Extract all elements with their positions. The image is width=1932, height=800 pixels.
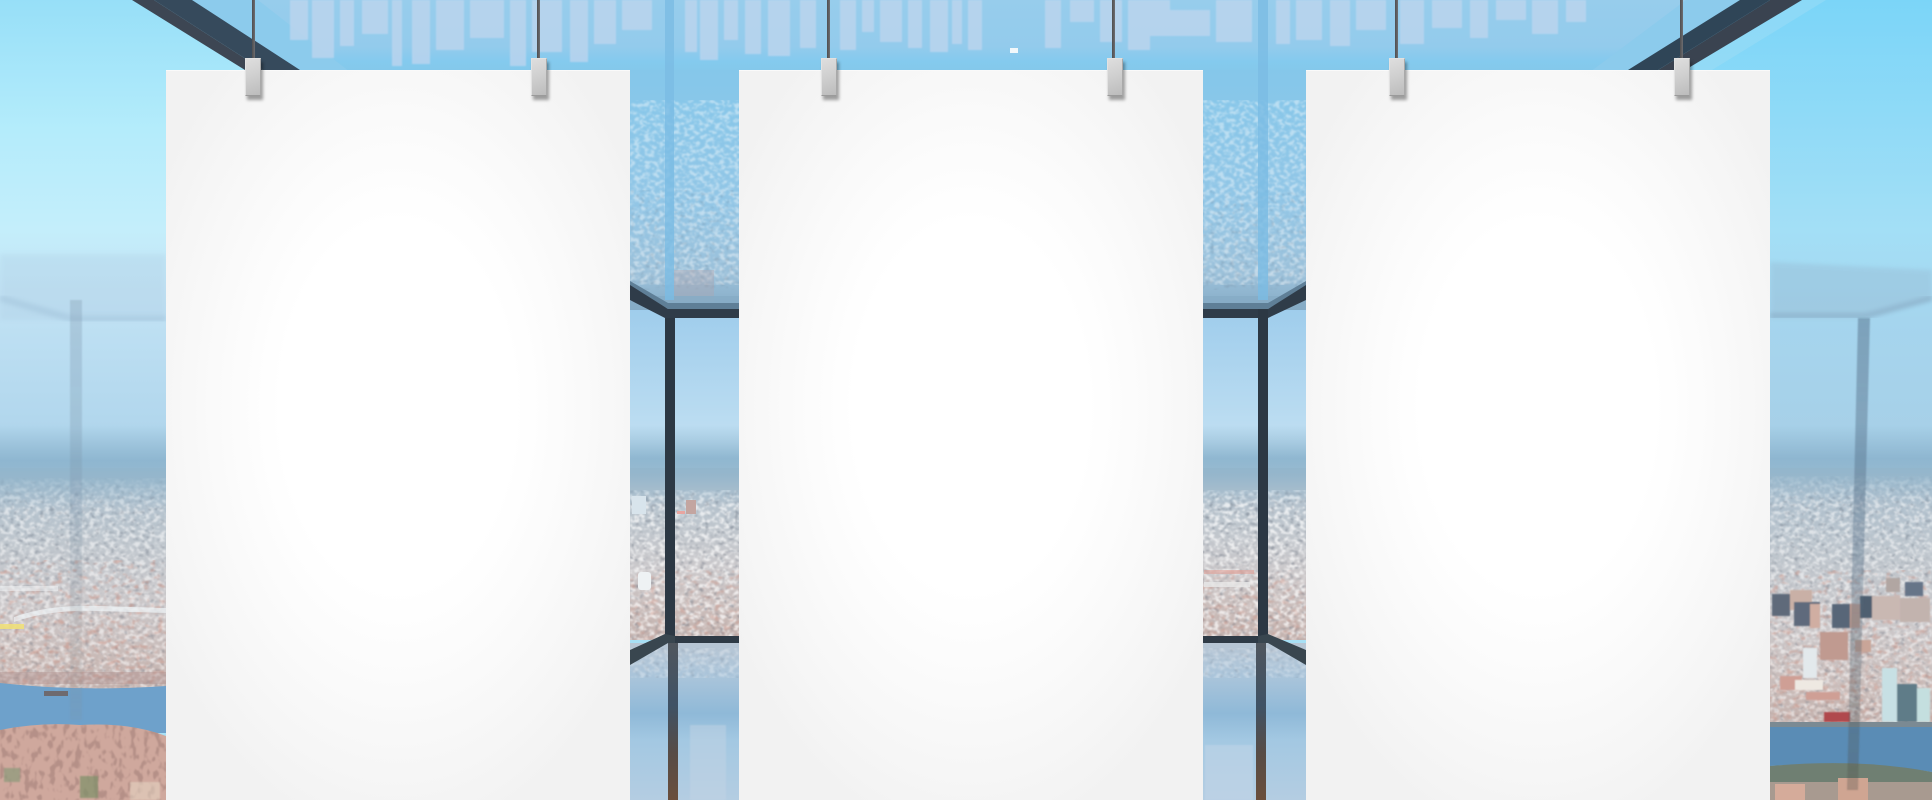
poster 2 left clip	[821, 58, 837, 96]
elevated road	[14, 606, 166, 622]
poster 1 left cable	[252, 0, 255, 58]
sky: through gaps between posters	[630, 310, 1306, 500]
ceiling beam: left	[132, 0, 300, 70]
poster 1 sheet	[166, 70, 630, 800]
left window city view	[0, 425, 166, 800]
floor reflection in gaps	[630, 643, 1306, 800]
upper glass wall reflection in gaps	[630, 0, 1306, 310]
poster 2 sheet	[739, 70, 1203, 800]
poster 2 right clip	[1107, 58, 1123, 96]
poster 3 right cable	[1680, 0, 1683, 58]
poster 3 left clip	[1389, 58, 1405, 96]
poster 2 right cable	[1112, 0, 1115, 58]
lighter glass band beside right beam	[1642, 0, 1739, 34]
poster 3	[1306, 0, 1770, 800]
poster 1	[166, 0, 630, 800]
sky: left side	[0, 0, 400, 500]
poster 3 sheet	[1306, 70, 1770, 800]
steel frame: gap 1	[630, 281, 739, 800]
white towers	[1882, 668, 1897, 722]
right window city view	[1770, 425, 1932, 800]
far bank with trees	[1770, 763, 1932, 782]
poster 2	[739, 0, 1203, 800]
ghost window frame reflection: left	[0, 254, 166, 720]
river	[0, 683, 166, 733]
poster 1 left clip	[245, 58, 261, 96]
steel frame: gap 2	[1203, 281, 1306, 800]
city view through gaps	[630, 425, 1306, 640]
brick housing	[0, 720, 166, 800]
glass ceiling with inverted city reflection	[190, 0, 1746, 72]
ceiling beam: right	[1628, 0, 1826, 70]
apartment blocks	[1772, 578, 1930, 722]
lighter glass band beside left beam	[193, 0, 288, 34]
ghost window frame reflection: right	[1770, 262, 1932, 790]
poster 1 right clip	[531, 58, 547, 96]
poster 1 right cable	[537, 0, 540, 58]
glass mullion strip, gap 1	[665, 0, 674, 300]
poster 3 right clip	[1674, 58, 1690, 96]
river	[1770, 727, 1932, 772]
poster 3 left cable	[1395, 0, 1398, 58]
poster 2 left cable	[827, 0, 830, 58]
inverted skyline reflection	[290, 0, 1586, 66]
glass mullion strip, gap 2	[1258, 0, 1268, 300]
sky: right side	[1640, 0, 1932, 500]
